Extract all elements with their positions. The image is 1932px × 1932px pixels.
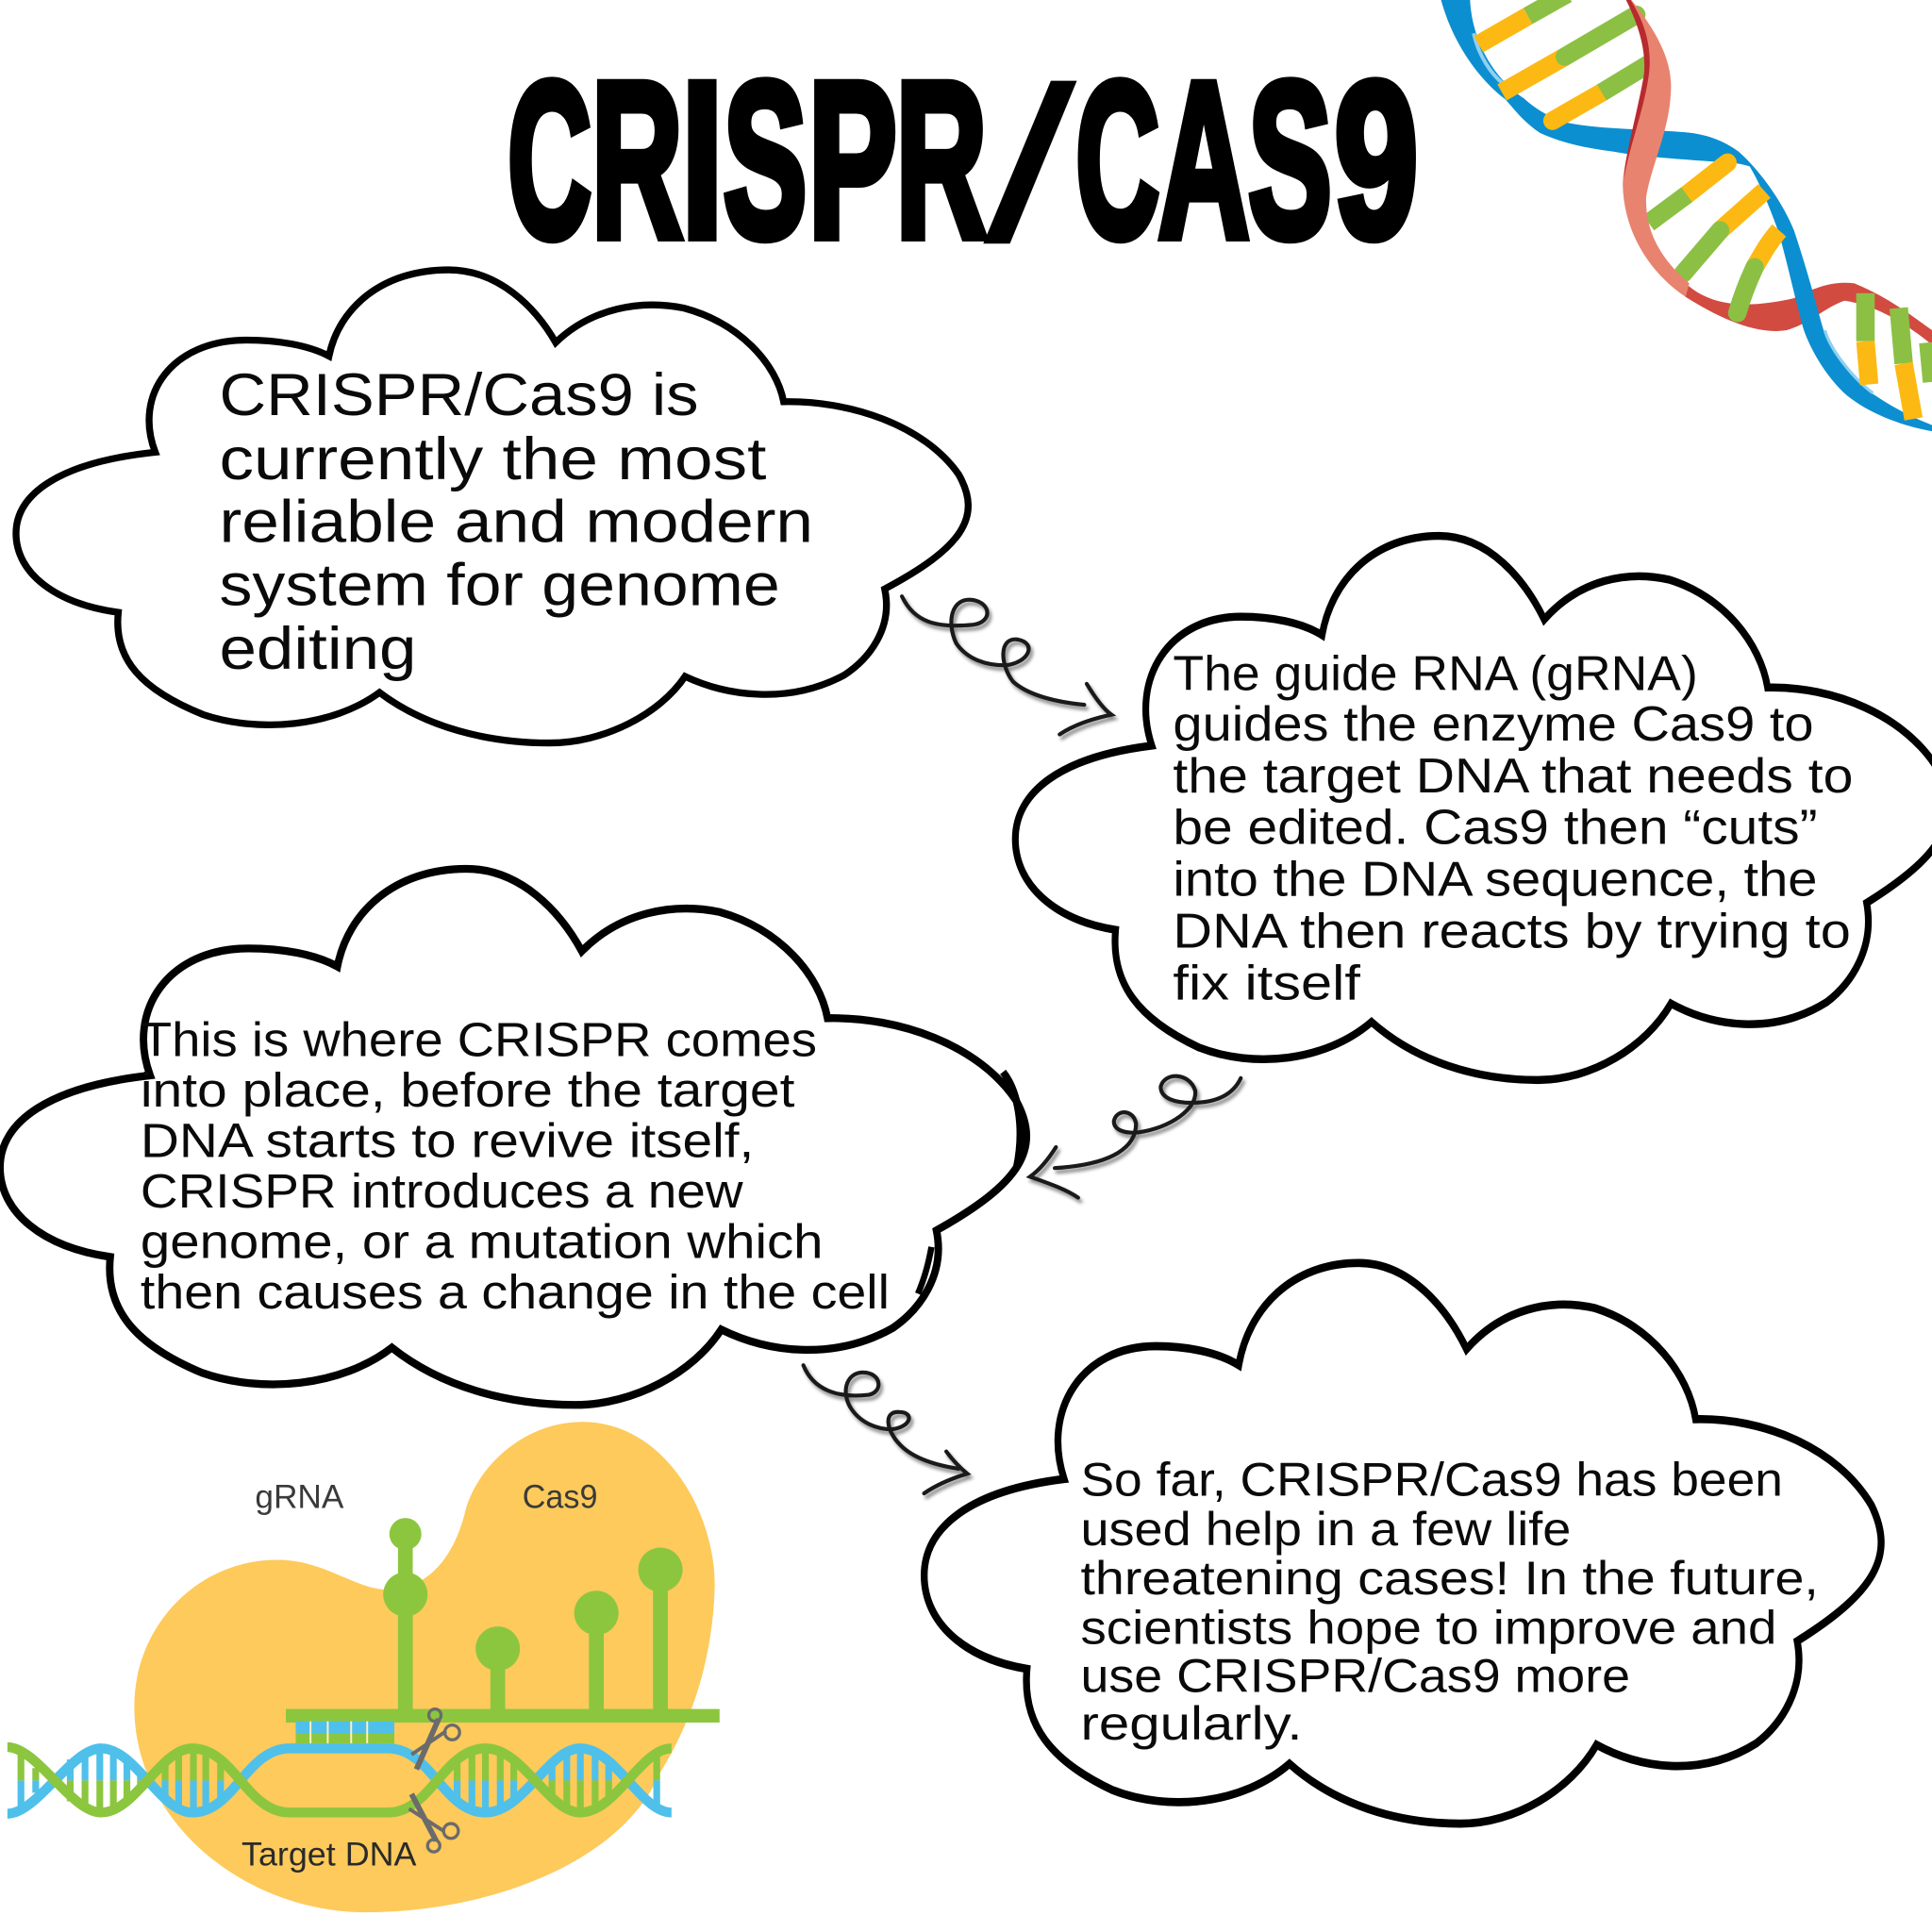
title: 9 [1335, 36, 1418, 284]
cloud 3 [0, 869, 1026, 1405]
label Target DNA: Target DNA [242, 1836, 417, 1873]
scissors top [411, 1709, 459, 1770]
cloud 2 [1015, 536, 1932, 1080]
title: C [508, 36, 591, 284]
title: S [1248, 36, 1332, 284]
cloud 4 [924, 1263, 1881, 1824]
text: cloud 4: So far, CRISPR/Cas9 has been [1080, 1454, 1783, 1507]
DNA strand blue [8, 1748, 672, 1814]
gRNA lollipops [286, 1518, 720, 1723]
text: cloud 3: This is where CRISPR comes [141, 1012, 817, 1066]
title: I [681, 36, 724, 284]
title: S [724, 36, 808, 284]
arrow: cloud 2 to cloud 3 [1030, 1076, 1241, 1198]
arrow: cloud 3 to cloud 4 [804, 1365, 967, 1493]
title: C [1075, 36, 1159, 284]
text: cloud 2: guides the enzyme Cas9 to [1173, 697, 1814, 752]
diagram: Cas9 gRNA target DNA [8, 1422, 720, 1912]
title: R [591, 36, 683, 284]
text: cloud 4: threatening cases! In the future, [1080, 1552, 1819, 1605]
text: cloud 2: The guide RNA (gRNA) [1173, 646, 1698, 701]
scissors bottom [409, 1794, 458, 1852]
text: cloud 4: use CRISPR/Cas9 more [1080, 1649, 1630, 1702]
text: cloud 2: DNA then reacts by trying to [1173, 904, 1851, 958]
text: cloud 4 [1080, 1454, 1819, 1750]
text: cloud 1: reliable and modern [219, 490, 813, 556]
text: cloud 3: CRISPR introduces a new [141, 1164, 743, 1218]
text: cloud 1: system for genome [219, 552, 780, 618]
text: cloud 3: genome, or a mutation which [141, 1215, 823, 1269]
arrow: cloud 1 to cloud 2 [902, 596, 1111, 734]
text: cloud 2 [1173, 646, 1853, 1010]
title [508, 36, 1418, 289]
text: cloud 1 [219, 362, 813, 682]
rungs [1478, 0, 1932, 419]
text: cloud 2: into the DNA sequence, the [1173, 853, 1818, 908]
text: cloud 2: the target DNA that needs to [1173, 749, 1853, 804]
text: cloud 1: editing [219, 616, 416, 682]
text: cloud 3 [141, 1012, 890, 1319]
cloud 1 [16, 270, 968, 743]
base pairing block [295, 1722, 394, 1743]
label gRNA: gRNA [255, 1479, 344, 1516]
title: R [896, 36, 987, 284]
DNA rungs [21, 1748, 657, 1812]
text: cloud 3: DNA starts to revive itself, [141, 1113, 754, 1167]
text: cloud 2: be edited. Cas9 then “cuts” [1173, 801, 1818, 856]
text: cloud 4: scientists hope to improve and [1080, 1601, 1776, 1654]
text: cloud 1: currently the most [219, 426, 766, 492]
text: cloud 4: regularly. [1080, 1697, 1303, 1750]
title: A [1158, 36, 1249, 284]
text: cloud 1: CRISPR/Cas9 is [219, 362, 699, 428]
text: cloud 3: then causes a change in the cell [141, 1265, 890, 1319]
text: cloud 2: fix itself [1173, 956, 1361, 1010]
icon: DNA double helix top right [1441, 0, 1932, 431]
text: cloud 4: used help in a few life [1080, 1503, 1571, 1556]
label Cas9: Cas9 [523, 1479, 597, 1516]
text: cloud 3: into place, before the target [141, 1063, 794, 1117]
DNA strand green [8, 1747, 672, 1812]
Cas9 protein blob [134, 1422, 715, 1912]
title: P [808, 36, 897, 284]
title: / [983, 41, 1078, 289]
